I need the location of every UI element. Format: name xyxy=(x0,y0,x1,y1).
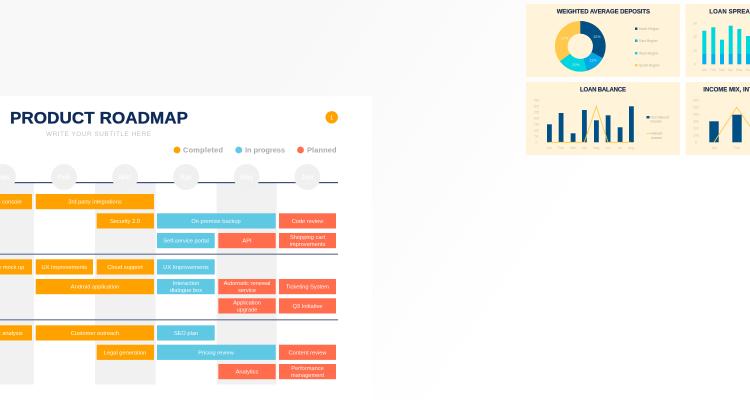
section 1 tasks: Shopping cart xyxy=(290,235,325,241)
legend: Planned xyxy=(307,146,337,154)
month labels: Feb xyxy=(710,68,716,72)
timeline: Mar xyxy=(119,174,131,182)
donut legend xyxy=(635,27,660,68)
month labels: Jan xyxy=(702,68,707,72)
month labels xyxy=(547,146,634,150)
section 2 tasks: Q3 Initiative xyxy=(292,304,323,310)
section 2 tasks: upgrade xyxy=(237,308,257,314)
section 3 tasks: Pricing review xyxy=(198,350,235,356)
month labels xyxy=(711,146,740,150)
section 2 tasks xyxy=(0,259,336,314)
section 1 tasks: Security 2.0 xyxy=(110,219,140,225)
section 3 tasks xyxy=(0,325,336,379)
month labels: Jun xyxy=(605,146,611,150)
axis labels: 100 xyxy=(534,128,539,132)
timeline xyxy=(0,164,338,320)
axis labels: 0 xyxy=(694,62,696,66)
axis labels: 40 xyxy=(693,35,697,39)
month labels: Feb xyxy=(734,146,740,150)
section 1 tasks: improvements xyxy=(290,242,326,248)
bar chart xyxy=(709,115,742,142)
month labels: Jul xyxy=(618,146,622,150)
legend: In progress xyxy=(245,146,285,154)
axis labels xyxy=(693,21,697,66)
timeline: Feb xyxy=(58,174,70,182)
badge xyxy=(326,111,338,124)
section 1 tasks xyxy=(0,194,336,248)
axis labels: 400 xyxy=(693,112,699,116)
timeline: May xyxy=(240,174,254,182)
month labels: May xyxy=(593,146,600,150)
donut chart xyxy=(561,27,601,67)
month labels: Aug xyxy=(628,146,634,150)
axis labels: 250 xyxy=(534,110,539,114)
month labels: Mar xyxy=(719,68,726,72)
heading: WEIGHTED AVERAGE DEPOSITS xyxy=(557,10,650,16)
axis labels xyxy=(534,98,539,144)
axis labels: 200 xyxy=(693,126,699,130)
axis labels: 0 xyxy=(536,140,538,144)
section 1 tasks: Self-service portal xyxy=(163,239,209,245)
section 3 tasks: Legal generation xyxy=(104,350,146,356)
axis labels: 0 xyxy=(695,140,697,144)
axis labels xyxy=(693,98,699,144)
line series xyxy=(549,106,631,142)
panel: weighted average deposits xyxy=(526,4,680,77)
axis labels: 350 xyxy=(534,98,539,102)
month labels: Jan xyxy=(711,146,717,150)
axis labels: 600 xyxy=(693,98,699,102)
axis labels: 60 xyxy=(693,21,697,25)
section 2 tasks: Automatic renewal xyxy=(224,281,270,287)
panel: product roadmap xyxy=(0,96,372,400)
line series xyxy=(714,107,750,142)
section 1 tasks: Code review xyxy=(292,219,324,225)
axis labels: 300 xyxy=(534,104,539,108)
heading: LOAN BALANCE xyxy=(580,87,626,93)
legend: Completed xyxy=(183,146,223,154)
axis labels: 100 xyxy=(693,134,699,138)
donut legend: North Region xyxy=(639,27,659,31)
month labels: Jan xyxy=(547,146,552,150)
section 3 tasks: Content review xyxy=(289,350,327,356)
section 3 tasks: management xyxy=(291,373,325,379)
bar chart xyxy=(547,106,634,142)
section 2 tasks: service xyxy=(238,288,256,294)
title: PRODUCT ROADMAP xyxy=(10,108,188,127)
section 2 tasks: Android application xyxy=(71,285,119,291)
section 2 tasks: UX Improvements xyxy=(42,265,87,271)
badge: 1 xyxy=(330,115,333,121)
chart legend: Income xyxy=(651,136,662,140)
subtitle: WRITE YOUR SUBTITLE HERE xyxy=(46,131,151,138)
donut chart: 37% xyxy=(561,36,569,40)
section 2 tasks: UX Improvements xyxy=(163,265,209,271)
donut chart: 11% xyxy=(590,58,597,62)
panel: income mix xyxy=(686,82,750,155)
chart legend: Non Interest xyxy=(650,116,669,120)
axis labels: 200 xyxy=(534,116,539,120)
donut legend: South Region xyxy=(639,64,660,68)
month labels: Mar xyxy=(570,146,577,150)
section 2 tasks: Cloud support xyxy=(107,265,143,271)
stacked bars xyxy=(702,26,750,64)
section 3 tasks: Customer outreach xyxy=(71,331,119,337)
section 2 tasks: Interaction xyxy=(173,281,199,287)
month labels xyxy=(702,68,750,72)
donut legend: West Region xyxy=(639,52,658,56)
section 3 tasks: SEO plan xyxy=(174,331,198,337)
chart legend: Income xyxy=(650,120,662,124)
chart legend: Interest xyxy=(651,132,662,136)
axis labels: 300 xyxy=(693,120,699,124)
section 3 tasks: Analytics xyxy=(236,370,259,376)
legend xyxy=(174,146,337,154)
donut chart: 32% xyxy=(593,35,601,39)
axis labels: 500 xyxy=(693,106,699,110)
month column bands xyxy=(0,182,277,384)
section 1 tasks: On premise backup xyxy=(191,219,241,225)
section 3 tasks: Performance xyxy=(291,366,324,372)
month labels: Apr xyxy=(728,68,734,72)
month labels: May xyxy=(736,68,743,72)
month labels: Apr xyxy=(582,146,588,150)
donut chart: 20% xyxy=(572,63,580,67)
section 2 tasks: Application xyxy=(233,300,261,306)
timeline: Apr xyxy=(180,174,192,182)
timeline: Jun xyxy=(301,174,314,182)
panel: loan balance xyxy=(526,82,680,155)
panel: loan spread xyxy=(686,4,750,77)
section 1 tasks: 3rd party integrations xyxy=(68,200,122,206)
section 2 tasks: Ticketing System xyxy=(286,285,329,291)
chart legend xyxy=(646,116,669,140)
axis labels: 50 xyxy=(535,134,538,138)
month labels: Feb xyxy=(558,146,564,150)
section 2 tasks: dialogue box xyxy=(170,288,202,294)
axis labels: 20 xyxy=(693,49,697,53)
donut legend: East Region xyxy=(639,39,658,43)
axis labels: 150 xyxy=(534,122,539,126)
section 1 tasks: API xyxy=(242,239,252,245)
